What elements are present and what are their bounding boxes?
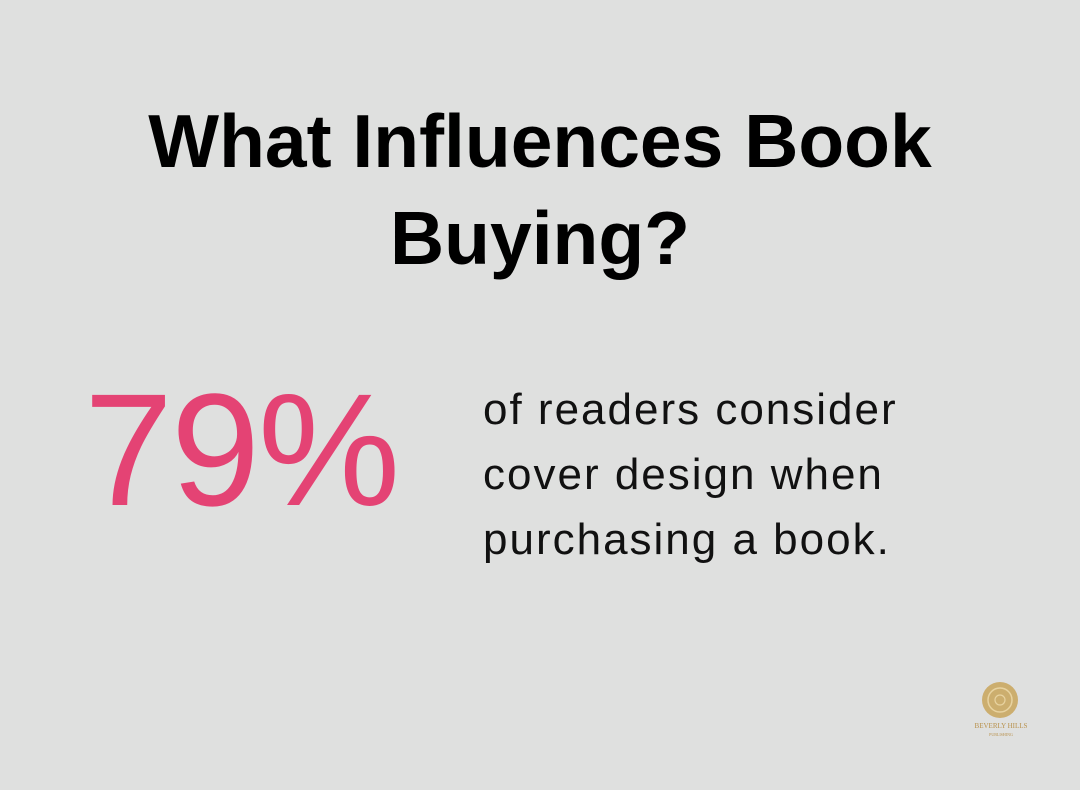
logo: Beverly Hills Publishing [974, 682, 1028, 737]
text block: description: of readers consider [483, 385, 898, 434]
text block: description: purchasing a book. [483, 515, 891, 564]
title [148, 99, 932, 280]
text block: description: cover design when [483, 450, 884, 499]
stat: 79%: 79% [84, 360, 398, 539]
title: Buying? [390, 196, 690, 280]
logo: Beverly Hills Publishing: BEVERLY HILLS [975, 722, 1028, 730]
logo: Beverly Hills Publishing: PUBLISHING [989, 732, 1013, 737]
text block: description [483, 385, 898, 564]
title: What Influences Book [148, 99, 932, 183]
